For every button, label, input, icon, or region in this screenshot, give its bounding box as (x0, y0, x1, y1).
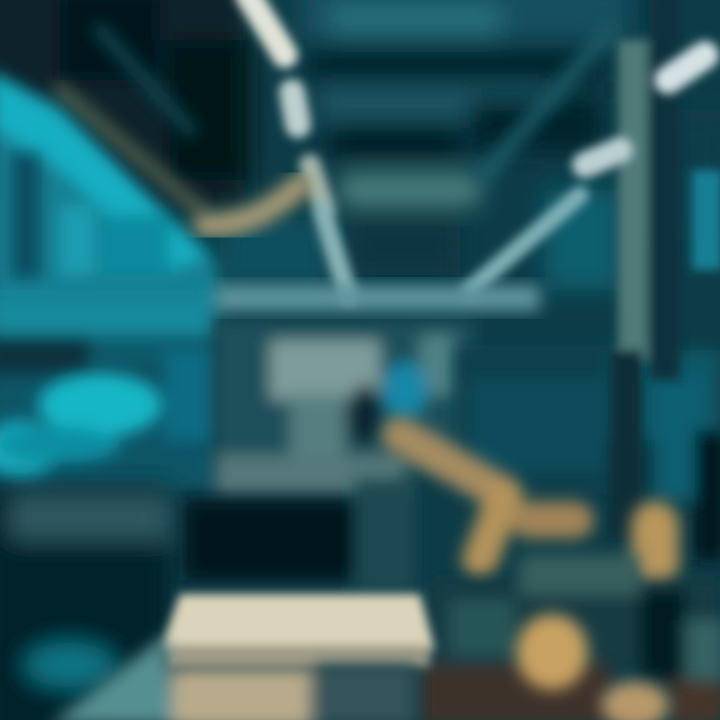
right teal panels (455, 345, 720, 560)
bottom left dark zone (0, 485, 170, 720)
left mid band (0, 295, 215, 490)
tan floor blobs (516, 614, 669, 720)
left cyan wedge wall (0, 70, 225, 310)
ceiling: dark structure with beams (0, 0, 720, 290)
tan ceiling beam (205, 185, 300, 225)
tan machine arm (400, 435, 655, 565)
centre machinery (215, 320, 475, 495)
left cyan blobs (0, 373, 162, 480)
ceiling diagonals (60, 30, 610, 210)
right vertical columns (610, 0, 720, 540)
right diagonal light streak (470, 55, 705, 290)
cream table (160, 594, 435, 667)
horizontal pale band (215, 285, 540, 311)
floor under table (50, 635, 415, 720)
white ceiling light streak (248, 0, 348, 295)
black machine block (185, 480, 415, 590)
lower right equipment (420, 555, 720, 720)
